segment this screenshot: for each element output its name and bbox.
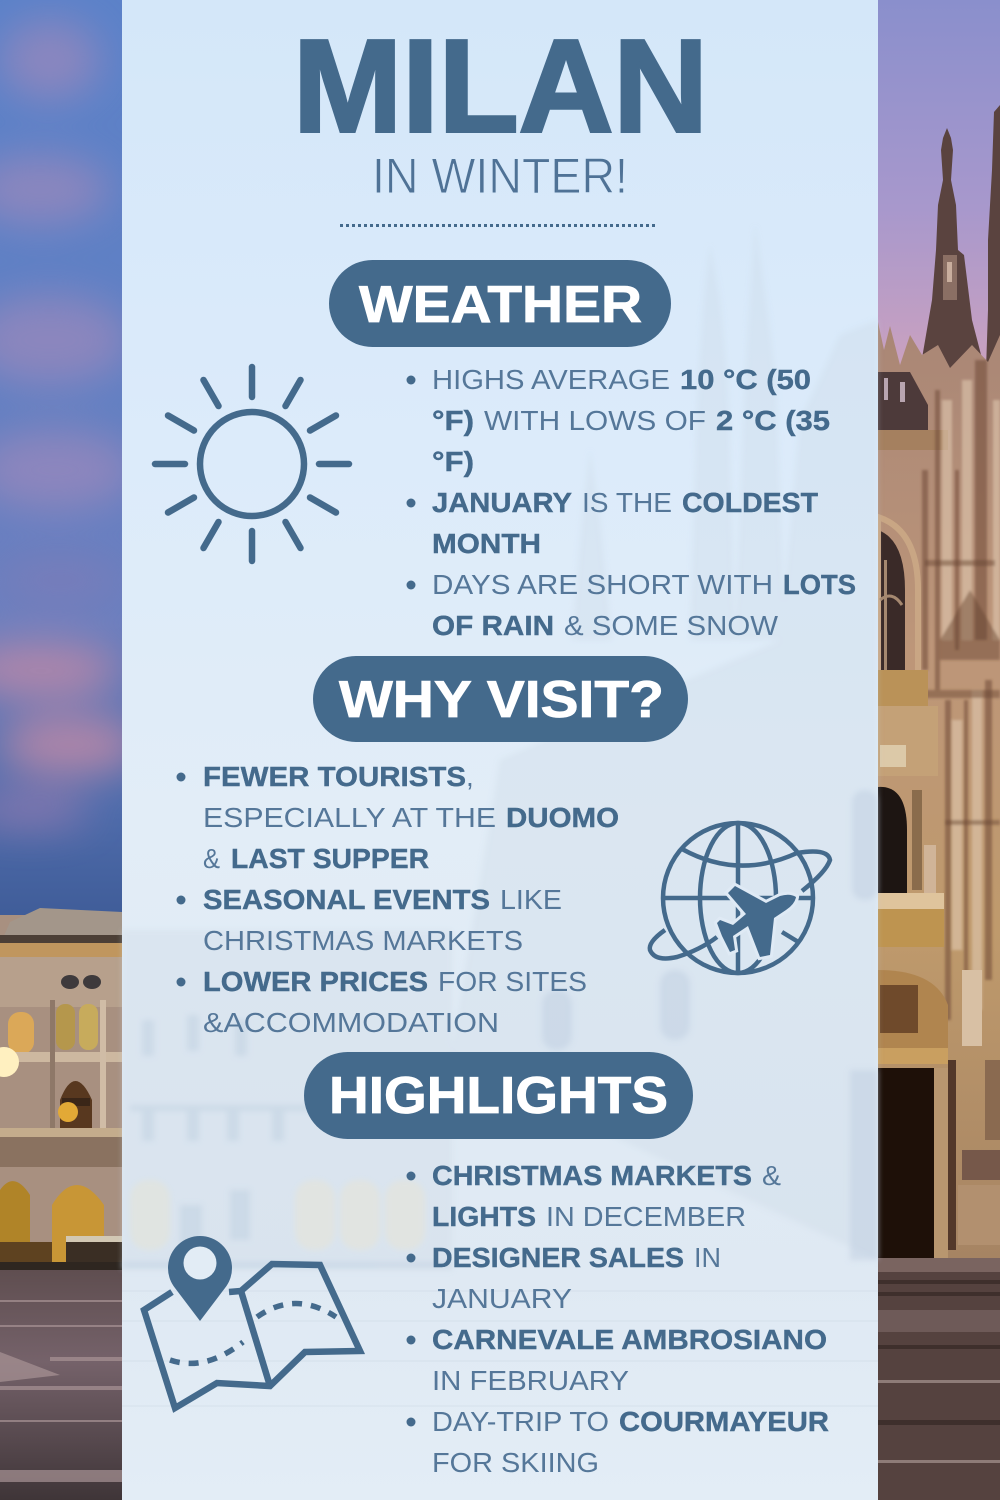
facade stone strips [922,360,1000,1020]
why visit bullet list: SEASONAL EVENTS [203,884,490,915]
heading pill: WHY VISIT?: WHY VISIT? [339,671,664,729]
weather bullet list [406,364,856,641]
why visit bullet list [176,761,619,1038]
cathedral facade [878,322,1000,1260]
portal [878,970,948,1060]
heading pill: HIGHLIGHTS: HIGHLIGHTS [329,1067,668,1125]
title: MILAN: MILAN [293,12,708,160]
left palazzo [0,908,122,1270]
weather bullet list: COLDEST [682,487,818,518]
translucent central panel [122,0,878,1500]
ghosted cathedral [450,225,878,1260]
why visit bullet list: LAST SUPPER [231,843,429,874]
highlights bullet list: DAY-TRIP TO [432,1406,609,1437]
heading pill: WEATHER [329,260,671,347]
weather bullet list: LOTS [783,569,856,600]
highlights bullet list: CARNEVALE AMBROSIANO [432,1324,827,1355]
right sky [878,0,1000,380]
cathedral spires [920,105,1000,370]
why visit bullet list: CHRISTMAS MARKETS [203,925,523,956]
right steps and plaza [878,1258,1000,1500]
highlights bullet list: CHRISTMAS MARKETS [432,1160,752,1191]
weather bullet list: HIGHS AVERAGE [432,364,670,395]
icon: map with location pin [144,1236,360,1408]
why visit bullet list: DUOMO [506,802,619,833]
highlights bullet list: IN FEBRUARY [432,1365,629,1396]
highlights bullet list: IN DECEMBER [546,1201,746,1232]
heading pill: WHY VISIT? [313,656,688,742]
why visit bullet list: & [203,843,220,874]
icon: sun [155,367,349,561]
highlights bullet list: IN [694,1242,721,1273]
highlights bullet list: COURMAYEUR [619,1406,829,1437]
icon: globe with plane [650,823,830,973]
subtitle: IN WINTER!: IN WINTER! [372,148,628,204]
balcony and lower window [878,670,928,706]
heading pill: WEATHER: WEATHER [359,276,642,334]
weather bullet list: DAYS ARE SHORT WITH [432,569,773,600]
weather bullet list: IS THE [582,487,672,518]
plane [717,886,796,957]
highlights bullet list: JANUARY [432,1283,572,1314]
left sky with pink clouds [0,0,140,920]
weather bullet list: MONTH [432,528,541,559]
why visit bullet list: , [466,761,474,792]
heading pill: HIGHLIGHTS [304,1052,693,1139]
weather bullet list: °F) [432,446,474,477]
highlights bullet list [406,1160,829,1478]
weather bullet list: & SOME SNOW [564,610,779,641]
highlights bullet list: LIGHTS [432,1201,536,1232]
highlights bullet list: FOR SKIING [432,1447,599,1478]
why visit bullet list: FOR SITES [438,966,587,997]
left plaza paving [0,1270,122,1500]
facade window [878,530,905,672]
weather bullet list: JANUARY [432,487,572,518]
weather bullet list: 10 °C (50 [680,364,811,395]
why visit bullet list: &ACCOMMODATION [203,1007,499,1038]
highlights bullet list: DESIGNER SALES [432,1242,684,1273]
weather bullet list: °F) [432,405,474,436]
why visit bullet list: FEWER TOURISTS [203,761,466,792]
why visit bullet list: LIKE [500,884,562,915]
weather bullet list: 2 °C (35 [716,405,830,436]
ghosted palazzo [122,930,452,1270]
highlights bullet list: & [762,1160,781,1191]
weather bullet list: OF RAIN [432,610,554,641]
why visit bullet list: ESPECIALLY AT THE [203,802,496,833]
weather bullet list: WITH LOWS OF [484,405,706,436]
why visit bullet list: LOWER PRICES [203,966,428,997]
